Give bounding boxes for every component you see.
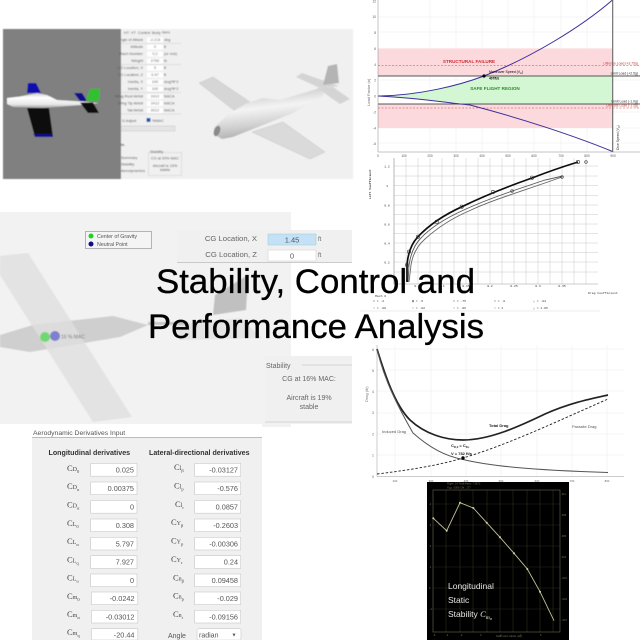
chart: lift vs drag polar: 0.8 xyxy=(384,204,390,208)
derivative symbols: r xyxy=(182,505,184,510)
chart: V-n flight envelope: 900 xyxy=(610,154,616,158)
chart: V-n flight envelope: -2 xyxy=(373,110,376,114)
chart: lift vs drag polar xyxy=(360,158,618,311)
derivative symbols: α xyxy=(77,506,80,510)
input values: -0.029 xyxy=(217,594,238,603)
panel: input form: Aero xyxy=(162,30,170,34)
input values: -0.03127 xyxy=(209,466,238,474)
chart: lift vs drag polar: 0.3 xyxy=(535,284,541,288)
panel: longitudinal static stability chart: 0 xyxy=(429,586,431,590)
panel: input form: 100 xyxy=(152,87,158,91)
chart: V-n flight envelope: ) xyxy=(522,70,523,74)
panel: input form: 0.47 xyxy=(151,73,159,77)
derivative symbols: α xyxy=(76,542,79,547)
panel: aerodynamic derivatives input: Longitudinal derivatives xyxy=(48,449,130,457)
input values: 0.308 xyxy=(116,521,134,530)
panel: longitudinal static stability chart: Static AoA: Alpha, deg xyxy=(496,634,522,638)
panel: aerodynamic derivatives input: radian xyxy=(199,632,219,640)
induced drag curve xyxy=(377,349,608,472)
panel: CG location inputs: CG Location, X xyxy=(205,234,257,243)
panel: input form: ts xyxy=(121,143,124,147)
chart: drag vs velocity: D,0 xyxy=(454,445,459,449)
panel: input form: Stability xyxy=(121,162,134,166)
chart: drag vs velocity: V = 782 ft/s xyxy=(451,451,473,456)
input values: 0.24 xyxy=(224,558,238,567)
derivative symbols: β xyxy=(181,523,184,528)
panel: input form: VT xyxy=(131,31,137,35)
derivative symbols: u xyxy=(76,578,79,584)
derivative symbols: α xyxy=(77,615,80,620)
panel: input form: CG Location, Z xyxy=(117,73,144,77)
derivative symbols: CY xyxy=(171,554,181,564)
panel: longitudinal static stability chart: -2 xyxy=(460,633,463,637)
caption: longitudinal static stability: Stability C xyxy=(448,609,486,619)
derivative symbols: p xyxy=(181,542,184,546)
panel: longitudinal static stability chart: .4 xyxy=(429,502,432,506)
chart: V-n flight envelope: Dive Speed (V xyxy=(616,128,620,150)
chart: lift vs drag polar: ◊ = .75 xyxy=(453,299,466,303)
chart: V-n flight envelope: 500 xyxy=(505,154,511,158)
panel: longitudinal static stability chart: -.004 xyxy=(561,597,567,601)
input values: -0.2603 xyxy=(213,521,238,530)
panel: input form xyxy=(115,30,182,176)
green safe region xyxy=(378,76,612,104)
derivative symbols: 0 xyxy=(76,524,79,529)
panel: input form: G Adjust xyxy=(122,119,137,123)
chart: V-n flight envelope: -4 xyxy=(373,126,376,130)
chart: lift vs drag polar: 0.35 xyxy=(558,284,566,288)
chart: V-n flight envelope: 400 xyxy=(479,154,485,158)
panel: input form: NACA xyxy=(164,108,175,112)
total drag curve xyxy=(377,349,608,440)
chart: V-n flight envelope: -6 xyxy=(373,142,376,146)
panel: CG location inputs: 1.45 xyxy=(285,236,299,244)
chart: V-n flight envelope: Limit Load (-1.0g) xyxy=(611,100,638,104)
chart: drag vs velocity: Parasite Drag xyxy=(572,424,596,429)
panel: input form: 2750 xyxy=(151,59,159,63)
chart: drag vs velocity: Induced Drag xyxy=(382,429,406,434)
chart: V-n flight envelope: ) xyxy=(616,125,620,126)
derivative symbols: q xyxy=(76,560,79,566)
icon: 3D rendered aircraft xyxy=(199,64,350,159)
caption: longitudinal static stability: Longitudinal xyxy=(448,581,494,591)
panel: stability result: Stability xyxy=(266,363,291,370)
panel: input form: (or m/s) xyxy=(164,52,178,56)
derivative symbols xyxy=(67,462,185,638)
input values: -20.44 xyxy=(114,631,134,640)
load factor curves xyxy=(378,0,612,96)
panel: input form: deg xyxy=(164,38,170,42)
chart: V-n flight envelope: 0 xyxy=(374,94,376,98)
panel: longitudinal static stability chart: 4 xyxy=(520,633,522,637)
panel: longitudinal static stability chart: Flight: 1A Total Mass: 7.5872 xyxy=(447,482,481,486)
panel: input form: NACA xyxy=(164,102,175,106)
derivative symbols: CD xyxy=(67,463,77,473)
panel: longitudinal static stability chart: .2 xyxy=(429,544,432,548)
panel: input form: 0 xyxy=(154,45,156,49)
chart: drag vs velocity: 300 xyxy=(429,479,434,483)
panel: longitudinal static stability chart: -4 xyxy=(446,633,449,637)
derivative symbols: q xyxy=(77,633,80,638)
panel: input form: Wing Root Airfoil xyxy=(115,94,143,98)
panel: input form: Inertia, X xyxy=(128,80,143,84)
panel: longitudinal static stability chart: .002 xyxy=(561,555,567,559)
chart: drag vs velocity: 1 xyxy=(372,454,374,458)
chart: V-n flight envelope: 4 xyxy=(374,63,376,67)
panel: aerodynamic derivatives input: Lateral-directional derivatives xyxy=(149,449,250,457)
panel: input form: Inertia, Y xyxy=(128,87,143,91)
panel: aerodynamic derivatives input: Angle xyxy=(168,633,186,640)
panel: CG location inputs: CG Location, Z xyxy=(205,250,257,259)
panel: input form: Mach Number xyxy=(119,52,144,56)
legend: Center of Gravity xyxy=(97,234,137,240)
chart: lift vs drag polar: ○ = .92 xyxy=(412,306,425,310)
derivative symbols: Cl xyxy=(174,480,181,490)
panel: CG and neutral point top view xyxy=(0,212,291,427)
caption: longitudinal static stability: Static xyxy=(448,595,470,605)
input values: -0.03012 xyxy=(106,612,134,621)
derivative symbols: CL xyxy=(67,554,76,564)
chart: lift vs drag polar: 0.2 xyxy=(487,284,493,288)
panel: input form: %MAC xyxy=(152,119,164,123)
input values: 7.927 xyxy=(116,558,134,567)
chart: lift vs drag polar: □ = .2 xyxy=(373,299,384,303)
title: Performance Analysis xyxy=(148,308,484,346)
chart: drag vs velocity: 5 xyxy=(372,369,374,373)
panel: longitudinal static stability chart: 2 xyxy=(500,633,502,637)
panel: input form: 0012 xyxy=(151,108,159,112)
chart: V-n flight envelope: 407ft/s xyxy=(489,76,499,80)
panel: longitudinal static stability chart: .1 xyxy=(429,565,432,569)
chart: V-n flight envelope: 700 xyxy=(558,154,564,158)
chart: drag vs velocity: 0 xyxy=(372,475,374,479)
panel: stability result xyxy=(265,356,352,424)
derivative symbols: CY xyxy=(171,517,181,527)
panel: input form: ft xyxy=(164,66,167,70)
chart: lift vs drag polar: 0.1 xyxy=(439,284,445,288)
chart: V-n flight envelope: 10 xyxy=(372,15,376,19)
derivative symbols: Cn xyxy=(173,609,182,619)
panel: input form: Body xyxy=(152,31,161,35)
panel: 3D side view xyxy=(3,29,121,179)
chart: lift vs drag polar: Mach # xyxy=(375,294,386,298)
input values xyxy=(106,466,238,640)
panel: CG location inputs: ft xyxy=(318,253,322,259)
aircraft planform: 16 % MAC xyxy=(61,334,85,340)
legend xyxy=(86,232,152,248)
chart: lift vs drag polar: 0.25 xyxy=(510,284,518,288)
input values: 0 xyxy=(130,576,134,585)
chart: lift vs drag polar: △ = .84 xyxy=(533,299,546,303)
panel: longitudinal static stability chart: .011 xyxy=(561,492,566,496)
caption: longitudinal static stability: m xyxy=(486,615,490,621)
derivative symbols: CL xyxy=(67,572,76,582)
derivative symbols: CL xyxy=(67,536,76,546)
panel: input form: NACA xyxy=(164,94,175,98)
panel: input form: 2412 xyxy=(151,102,159,106)
panel: input form: ngle of Attack xyxy=(120,38,143,42)
chart: V-n flight envelope: 200 xyxy=(427,154,433,158)
chart: lift vs drag polar: Lift Coefficient xyxy=(368,169,372,199)
panel: longitudinal static stability chart: -5 xyxy=(433,633,436,637)
caption: longitudinal static stability: α xyxy=(490,616,493,621)
derivative symbols: β xyxy=(181,468,184,473)
chart: V-n flight envelope: Ultimate Load (-1.5g) xyxy=(606,104,638,108)
chart: lift vs drag polar: Drag Coefficient xyxy=(588,291,618,295)
input values: -0.00306 xyxy=(209,539,238,548)
input values: 0.00375 xyxy=(108,484,134,493)
panel: input form: CG at 20% MAC xyxy=(151,156,179,160)
red caution bands xyxy=(378,48,612,128)
chart: V-n flight envelope: Maneuver Speed (V xyxy=(489,70,520,74)
derivative symbols: β xyxy=(182,578,185,584)
legend: Neutral Point xyxy=(97,242,128,248)
chart: drag vs velocity: 400 xyxy=(464,479,469,483)
panel: stability result: CG at 16% MAC: xyxy=(282,376,336,383)
panel: input form: Summary xyxy=(121,156,137,160)
chart: lift vs drag polar: 0.05 xyxy=(414,284,422,288)
parasite drag curve xyxy=(377,399,608,474)
chart: V-n flight envelope: 300 xyxy=(453,154,459,158)
derivative symbols: CD xyxy=(67,500,77,510)
panel: longitudinal static stability chart: Xcg: .0006 CM: .177 xyxy=(447,486,471,490)
chart: lift vs drag polar: 0.2 xyxy=(384,260,390,264)
derivative symbols: Cm xyxy=(67,627,77,637)
chart: V-n flight envelope: Ultimate Load (+3.75g) xyxy=(603,62,638,66)
drag polar curves xyxy=(408,176,563,282)
panel: input form: -2.216 xyxy=(150,38,160,42)
chart: drag vs velocity: 700 xyxy=(570,479,575,483)
chart: drag vs velocity: 500 xyxy=(499,479,504,483)
panel: input form: Tail Airfoil xyxy=(127,108,143,112)
chart: lift vs drag polar: 1 xyxy=(386,184,388,188)
chart: V-n flight envelope: 800 xyxy=(584,154,590,158)
panel: input form: HT xyxy=(124,31,130,35)
chart: drag vs velocity: Drag (lb) xyxy=(364,386,369,402)
panel: longitudinal static stability chart: 6 xyxy=(540,633,542,637)
chart: V-n flight envelope: D xyxy=(618,126,621,128)
derivative symbols: Cl xyxy=(175,499,182,509)
chart: V-n flight envelope xyxy=(366,0,640,158)
derivative symbols: 0 xyxy=(77,597,80,602)
chart: lift vs drag polar: ○ = .96 xyxy=(453,306,466,310)
panel: longitudinal static stability chart: -.007 xyxy=(561,618,567,622)
panel: input form: ft xyxy=(164,45,167,49)
chart: drag vs velocity: 600 xyxy=(535,479,540,483)
chart: V-n flight envelope: 100 xyxy=(401,154,407,158)
input values: -0.0242 xyxy=(110,594,134,603)
panel: CG location inputs: ft xyxy=(318,237,322,243)
panel: longitudinal static stability chart: -.1 xyxy=(429,607,433,611)
chart: lift vs drag polar: ○ = .88 xyxy=(373,306,386,310)
chart: V-n flight envelope: 600 xyxy=(531,154,537,158)
chart: V-n flight envelope: 6 xyxy=(374,47,376,51)
panel: input form: slug*ft^2 xyxy=(164,87,178,91)
panel: longitudinal static stability chart: 0 xyxy=(480,633,482,637)
derivative symbols: u xyxy=(77,487,80,492)
panel: input form: slug*ft^2 xyxy=(164,80,178,84)
derivative symbols: CL xyxy=(67,518,76,528)
panel: aerodynamic derivatives input: ▼ xyxy=(232,632,236,638)
derivative symbols: 0 xyxy=(77,469,80,474)
input boxes xyxy=(91,464,241,640)
derivative symbols: CD xyxy=(67,481,77,491)
panel: longitudinal static stability chart: .3 xyxy=(429,523,432,527)
chart: lift vs drag polar: 0.15 xyxy=(462,284,470,288)
panel: input form: CG Location, X xyxy=(117,66,143,70)
panel: CG location inputs: 0 xyxy=(290,252,294,260)
derivative symbols: Cn xyxy=(173,590,182,600)
chart: drag vs velocity: = C xyxy=(458,443,466,448)
panel: input form: Stability xyxy=(150,150,163,154)
panel: input form: Altitude xyxy=(130,45,143,49)
derivative symbols: Cl xyxy=(174,462,181,472)
input values: 0 xyxy=(130,502,134,512)
chart: V-n flight envelope: 0 xyxy=(377,154,379,158)
derivative symbols: Cn xyxy=(173,572,182,582)
panel: input form: lb xyxy=(164,59,167,63)
panel: aerodynamic derivatives input xyxy=(0,424,262,640)
chart: V-n flight envelope: Limit Load (+2.5g) xyxy=(611,72,638,76)
panel: stability result: stable xyxy=(300,404,318,411)
chart: lift vs drag polar: △ = 1.05 xyxy=(533,306,548,310)
chart: V-n flight envelope: Load Factor (n) xyxy=(366,78,371,106)
chart: V-n flight envelope: 8 xyxy=(374,31,376,35)
derivative symbols: Cm xyxy=(67,609,77,619)
derivative symbols: r xyxy=(182,615,184,620)
chart: drag vs velocity: 4 xyxy=(372,390,374,394)
derivative symbols: p xyxy=(181,486,184,492)
Cm alpha line xyxy=(433,503,554,621)
panel: stability result: Aircraft is 19% xyxy=(286,395,332,402)
panel: aerodynamic derivatives input: Aerodynamic Derivatives Input xyxy=(33,430,125,437)
panel: input form: 2412 xyxy=(151,94,159,98)
chart: lift vs drag polar: 1.2 xyxy=(384,164,390,168)
input values: 0.0857 xyxy=(216,502,238,512)
chart: drag vs velocity: 2 xyxy=(372,432,374,436)
derivative symbols: r xyxy=(181,560,183,565)
panel: input form: Aerodynamics xyxy=(121,169,145,173)
title xyxy=(148,263,484,346)
panel: input form: stable xyxy=(160,168,170,172)
aircraft planform xyxy=(0,253,262,422)
panel: input form: Wing Tip Airfoil xyxy=(118,102,143,106)
chart: drag vs velocity: 3 xyxy=(372,411,374,415)
chart: lift vs drag polar: 0.6 xyxy=(384,222,390,226)
chart: drag vs velocity: D,i xyxy=(466,445,470,449)
chart: lift vs drag polar: 0.4 xyxy=(384,242,390,246)
panel: longitudinal static stability chart xyxy=(427,482,569,640)
input values: 5.797 xyxy=(116,539,134,548)
panel: longitudinal static stability chart: -.001 xyxy=(561,576,567,580)
panel: longitudinal static stability chart: .008 xyxy=(561,513,567,517)
chart: lift vs drag polar: ○ = 1 xyxy=(494,306,503,310)
derivative symbols: CY xyxy=(171,536,181,546)
panel: input form: Weight xyxy=(131,59,144,63)
panel: input form: Aircraft is 15% xyxy=(153,164,178,168)
chart: drag vs velocity xyxy=(364,345,624,483)
panel: CG location inputs xyxy=(177,230,352,262)
derivative symbols: p xyxy=(182,596,185,602)
chart: V-n flight envelope: 2 xyxy=(374,78,376,82)
panel: aircraft geometry software xyxy=(3,29,353,179)
input values: 0.025 xyxy=(116,466,134,474)
chart: V-n flight envelope: SAFE FLIGHT REGION xyxy=(470,86,520,91)
chart: V-n flight envelope: STRUCTURAL FAILURE xyxy=(443,59,495,64)
input values: -0.576 xyxy=(217,484,238,493)
chart: drag vs velocity: Total Drag xyxy=(489,423,509,428)
panel: input form: Control xyxy=(138,31,150,35)
chart: lift vs drag polar: ◊ = .8 xyxy=(494,299,505,303)
panel: longitudinal static stability chart: .005 xyxy=(561,534,567,538)
panel: input form: 5 xyxy=(154,66,156,70)
title: Stability, Control and xyxy=(156,263,475,301)
caption: longitudinal static stability xyxy=(448,581,494,621)
panel: input form: ft xyxy=(164,73,167,77)
chart: lift vs drag polar: ▥ = .5 xyxy=(412,299,423,303)
chart: V-n flight envelope: A xyxy=(520,72,522,75)
chart: drag vs velocity: 800 xyxy=(605,479,610,483)
chart: drag vs velocity: 200 xyxy=(393,479,398,483)
panel: input form: 100 xyxy=(152,80,158,84)
chart: drag vs velocity: 6 xyxy=(372,348,374,352)
panel: input form: 0.2 xyxy=(152,52,158,56)
chart: drag vs velocity: C xyxy=(451,443,454,448)
input values: 0.09458 xyxy=(212,576,238,585)
derivative symbols: Cm xyxy=(67,591,77,601)
input values: -0.09156 xyxy=(209,612,238,621)
